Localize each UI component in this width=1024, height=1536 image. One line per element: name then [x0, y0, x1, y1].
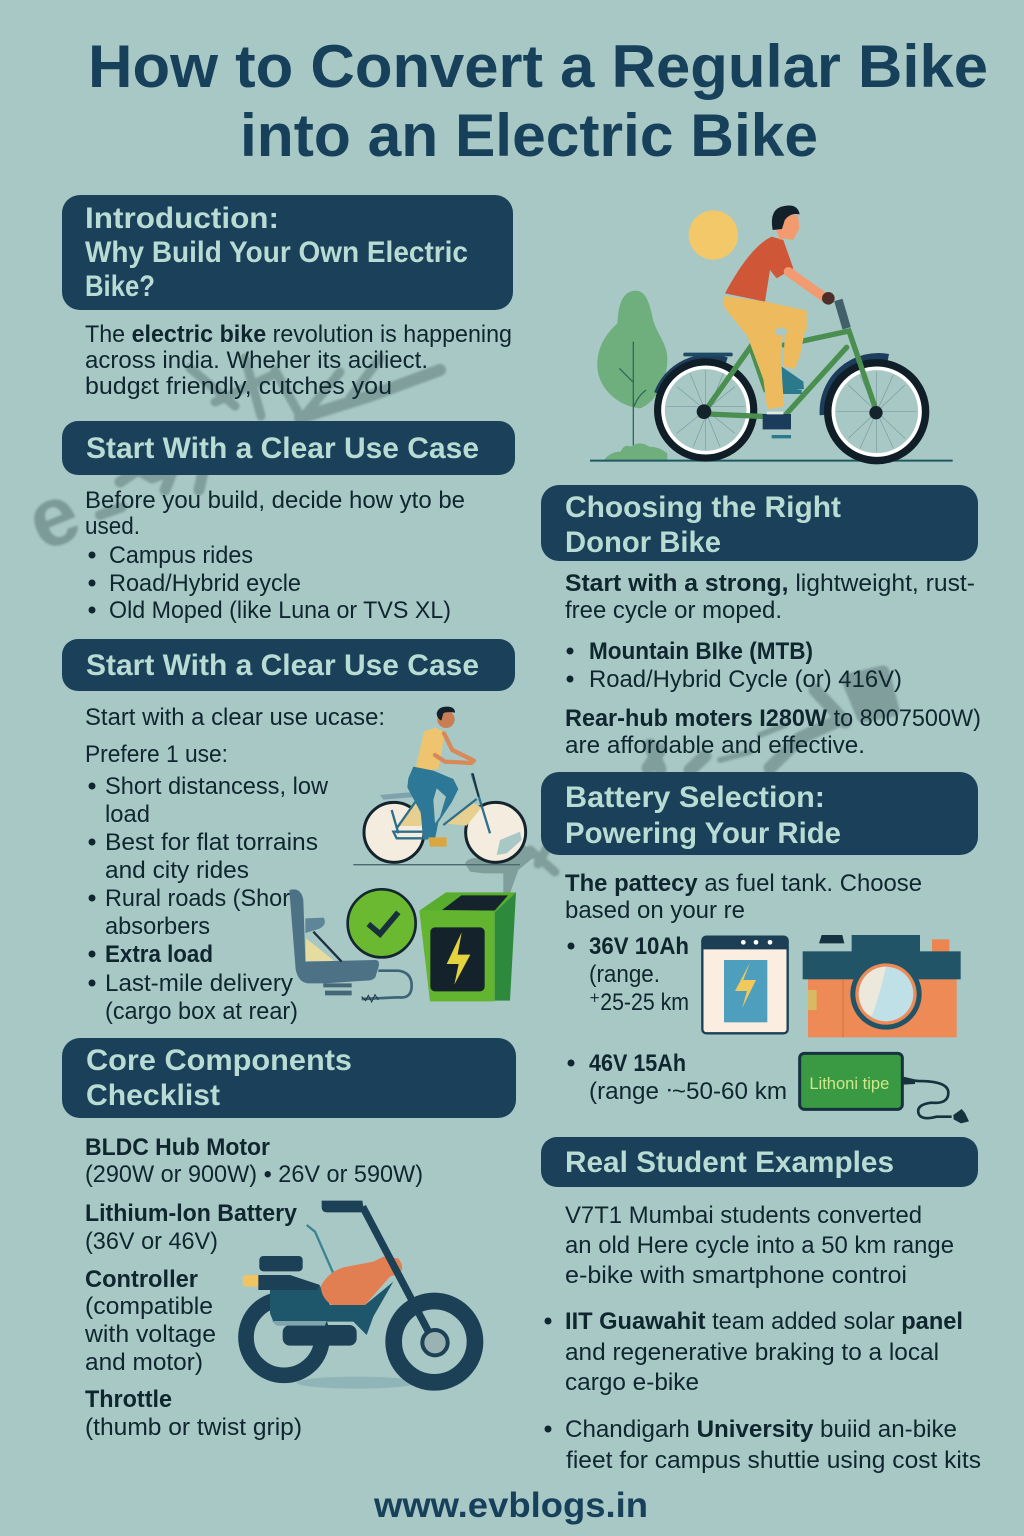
text block: donor bike: Rear-hub moters I280W to 8007500W) — [565, 705, 981, 732]
text block: components checklist: with voltage — [84, 1321, 216, 1348]
text block: 36V battery: (range. — [589, 961, 660, 988]
text block: preferred use list: Last-mile delivery — [105, 970, 294, 997]
text block: components checklist: BLDC Hub Motor — [85, 1134, 270, 1161]
text block: donor bike: Start with a strong, lightweight, rust- — [565, 570, 975, 597]
text block: introduction: The electric bike revolution is happening — [85, 321, 512, 348]
text block: use case list: used. — [85, 513, 140, 540]
text block: 46V battery: 46V 15Ah — [589, 1050, 686, 1077]
panel: introduction heading — [62, 195, 513, 310]
panel: donor bike heading: Donor Bike — [565, 526, 721, 559]
text block: donor bike: are affordable and effective. — [565, 732, 865, 759]
text block: student examples: an old Here cycle into a 50 km range — [565, 1232, 954, 1259]
text block: preferred use list: Start with a clear use ucase: — [85, 704, 385, 731]
text block: preferred use list: (cargo box at rear) — [105, 998, 298, 1025]
panel: second use case heading — [62, 639, 515, 691]
panel: donor bike heading: Choosing the Right — [565, 491, 841, 524]
text block: donor bike: free cycle or moped. — [565, 597, 782, 624]
title: into an Electric Bike — [240, 102, 818, 169]
title — [88, 33, 988, 169]
icon: rider on city bike — [353, 707, 538, 893]
panel: battery heading — [541, 772, 978, 855]
panel: introduction heading: Introduction: — [85, 202, 279, 235]
panel: second use case heading: Start With a Clear Use Case — [86, 649, 479, 682]
text block: student examples — [544, 1202, 981, 1474]
front wheel — [828, 363, 925, 460]
text block: preferred use list: Rural roads (Shor — [105, 885, 290, 912]
text block: components checklist: (290W or 900W) • 26V or 590W) — [85, 1161, 423, 1188]
rear wheel — [658, 362, 753, 458]
text block: preferred use list: Best for flat torrains — [105, 829, 318, 856]
text block: preferred use list: Prefere 1 use: — [85, 741, 228, 768]
footer website: www.evblogs.in — [373, 1486, 648, 1525]
text block: donor bike: Road/Hybrid Cycle (or) 416V) — [589, 666, 902, 693]
text block: components checklist: Controller — [85, 1266, 198, 1293]
text block: components checklist: and motor) — [85, 1349, 203, 1376]
icon: orange camera — [803, 935, 961, 1037]
text block: use case list: Old Moped (like Luna or TVS XL) — [109, 597, 451, 624]
text block: introduction — [85, 321, 512, 400]
watermark smudges — [14, 358, 893, 872]
text block: preferred use list: absorbers — [105, 913, 210, 940]
icon: moped illustration — [243, 1201, 475, 1389]
text block: battery intro: based on your re — [565, 897, 745, 924]
title: How to Convert a Regular Bike — [88, 33, 988, 100]
text block: donor bike — [565, 570, 981, 759]
text block: components checklist: (compatible — [85, 1293, 213, 1320]
panel: clear use case heading: Start With a Clear Use Case — [86, 432, 479, 465]
text block: introduction: budgɛt friendly, cutches you — [85, 373, 392, 400]
panel: clear use case heading — [62, 421, 515, 475]
text block: student examples: and regenerative braking to a local — [565, 1339, 939, 1366]
text block: use case list: Campus rides — [109, 542, 253, 569]
text block: 46V battery: (range ᐧ~50-60 km — [589, 1078, 787, 1105]
text block: preferred use list — [85, 704, 385, 1025]
icon: seat with cable — [289, 889, 412, 1002]
text block: preferred use list: Short distancess, low — [105, 773, 328, 800]
icon: green check badge — [348, 889, 416, 957]
panel: battery heading: Battery Selection: — [565, 781, 825, 814]
panel: battery heading: Powering Your Ride — [565, 817, 841, 850]
text block: preferred use list: Extra load — [105, 941, 213, 968]
text block: preferred use list: load — [105, 801, 150, 828]
icon: lithium battery pack with plug — [800, 1053, 969, 1123]
text block: use case list — [85, 487, 465, 624]
text block: 36V battery: ⁺25-25 km — [589, 989, 689, 1016]
text block: use case list: Before you build, decide how yto be — [85, 487, 465, 514]
panel: introduction heading: Why Build Your Own Electric — [85, 236, 468, 269]
icon: battery window card — [702, 937, 788, 1033]
watermark smudges: e — [14, 464, 92, 569]
text block: battery intro — [565, 870, 922, 924]
text block: battery intro: The pattecy as fuel tank. Choose — [565, 870, 922, 897]
text block: components checklist: (thumb or twist grip) — [85, 1414, 302, 1441]
text block: components checklist — [84, 1134, 423, 1441]
text block: student examples: IIT Guawahit team added solar panel — [565, 1308, 963, 1335]
text block: components checklist: (36V or 46V) — [85, 1228, 218, 1255]
panel: student examples heading — [541, 1137, 978, 1187]
text block: 36V battery — [568, 933, 689, 1016]
panel: core components heading — [62, 1038, 516, 1118]
text block: components checklist: Throttle — [85, 1386, 172, 1413]
text block: donor bike: Mountain BIke (MTB) — [589, 638, 813, 665]
text block: student examples: V7T1 Mumbai students converted — [565, 1202, 922, 1229]
panel: introduction heading: Bike? — [85, 270, 155, 303]
icon: lithium battery pack with plug: Lithoni tipe — [809, 1074, 889, 1093]
text block: 46V battery — [568, 1050, 787, 1105]
panel: core components heading: Checklist — [86, 1079, 220, 1112]
text block: use case list: Road/Hybrid eycle — [109, 570, 301, 597]
icon: green battery box — [419, 892, 516, 1001]
text block: components checklist: Lithium-lon Battery — [85, 1200, 297, 1227]
text block: preferred use list: and city rides — [105, 857, 249, 884]
panel: hero illustration of cyclist — [590, 205, 953, 461]
panel: donor bike heading — [541, 485, 978, 561]
text block: student examples: fieet for campus shuttie using cost kits — [566, 1447, 981, 1474]
text block: introduction: across india. Wheher its aciliect. — [85, 347, 428, 374]
panel: core components heading: Core Components — [86, 1044, 352, 1077]
text block: student examples: Chandigarh University buiid an-bike — [565, 1416, 957, 1443]
panel: student examples heading: Real Student Examples — [565, 1146, 894, 1179]
text block: student examples: e-bike with smartphone controi — [565, 1262, 907, 1289]
text block: 36V battery: 36V 10Ah — [589, 933, 689, 960]
text block: student examples: cargo e-bike — [565, 1369, 699, 1396]
